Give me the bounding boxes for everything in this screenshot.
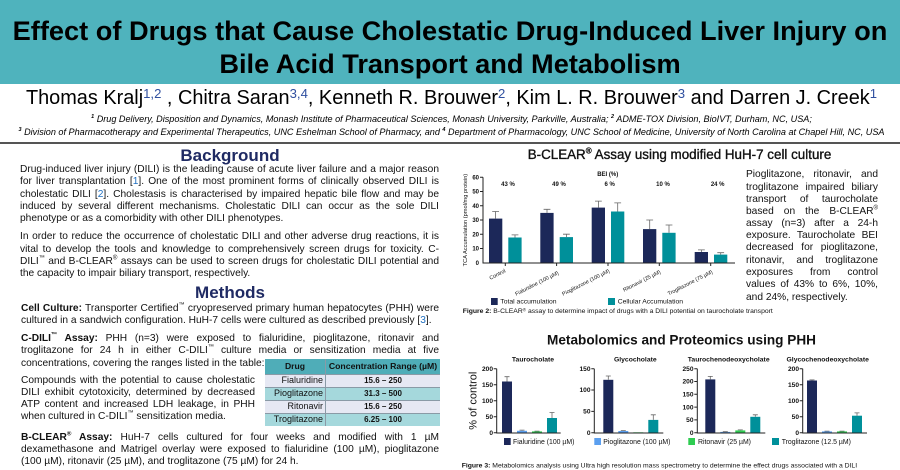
chart: Taurochenodeoxycholate: 150 (682, 392, 694, 398)
table row: Troglitazone (265, 413, 440, 426)
heading: metabolomics and proteomics: Metabolomics and Proteomics using PHH (547, 333, 816, 348)
chart: Glycochenodeoxycholate: 0 (795, 430, 799, 437)
legend: Fialuridine: Fialuridine (100 µM) (513, 439, 574, 446)
x axis labels: Troglitazone (75 µM) (667, 269, 714, 297)
chart: Glycocholate (579, 356, 663, 437)
text: B-CLEAR assay (21, 431, 439, 467)
chart: B-CLEAR TCA accumulation bar chart: 10 (472, 247, 480, 253)
heading: B-CLEAR assay: B-CLEAR® Assay using modified HuH-7 cell culture (528, 147, 831, 162)
text: background paragraph 1: induced by several different mechanisms. Cholestatic DILI can occur as the sole DILI (20, 201, 439, 212)
x axis labels: Ritonavir (25 µM) (622, 269, 662, 294)
table row: Pioglitazone: Pioglitazone (274, 388, 323, 398)
x axis labels: Pioglitazone (100 µM) (561, 268, 611, 298)
chart: Glycocholate: 150 (579, 366, 591, 373)
table row: Pioglitazone: 31.3 – 500 (364, 389, 402, 398)
table row: Troglitazone: 6.25 – 100 (364, 415, 402, 424)
chart: Taurocholate: 0 (489, 430, 493, 437)
chart: B-CLEAR TCA accumulation bar chart: 50 (472, 190, 480, 196)
text: background paragraph 2: the capacity to impair biliary transport, respectively. (20, 268, 250, 279)
table row: Fialuridine: 15.6 – 250 (364, 376, 402, 385)
affiliations: 1 Drug Delivery, Disposition and Dynamics, Monash Institute of Pharmaceutical Sciences, Monash University, Parkville, Australia; 2 ADME-TOX Division, BioIVT, Durham, NC, USA; (91, 114, 812, 124)
text: B-CLEAR findings: based on the B-CLEAR® (746, 204, 878, 216)
text: cell culture (21, 302, 439, 326)
x axis labels (489, 268, 714, 298)
BEI values: 6 % (605, 182, 616, 188)
BEI values: 10 % (656, 182, 670, 188)
legend: Ritonavir: Ritonavir (25 µM) (698, 439, 751, 446)
chart: B-CLEAR TCA accumulation bar chart: 30 (472, 218, 480, 224)
legend: cellular accumulation: Cellular Accumulation (618, 299, 683, 306)
text: background paragraph 1: for liver transplantation [1]. One of the most prominent forms of clinically observed DILI is (20, 176, 439, 187)
chart: B-CLEAR TCA accumulation bar chart: 20 (472, 232, 480, 238)
chart: Taurochenodeoxycholate: 0 (690, 430, 694, 437)
legend: Troglitazone: Troglitazone (12.5 µM) (782, 439, 851, 446)
table row: Fialuridine (265, 374, 440, 387)
title: Bile Acid Transport and Metabolism (219, 48, 681, 79)
text: B-CLEAR findings (746, 168, 878, 302)
chart: Glycochenodeoxycholate: 100 (788, 398, 799, 405)
table header: Drug (285, 361, 305, 371)
chart: B-CLEAR TCA accumulation bar chart (463, 172, 735, 306)
x axis labels: Control (489, 268, 507, 282)
caption: figure 3: Figure 3: Metabolomics analysis using Ultra high resolution mass spectrometry to determine the effect drugs associated with a DILI (462, 462, 857, 469)
chart: Taurocholate: 100 (482, 398, 493, 405)
text: cell culture: Cell Culture: Transporter Certified™ cryopreserved primary human hepatocytes (PHH) were (21, 302, 439, 314)
text: background paragraph 2: vital to develop the tools and knowledge to comprehensively screen drugs for toxicity. C- (20, 244, 439, 255)
BEI values (501, 172, 725, 188)
text: B-CLEAR findings: troglitazone impaired biliary (746, 182, 878, 192)
title banner (0, 0, 900, 84)
BEI values: 49 % (552, 182, 566, 188)
text: B-CLEAR findings: transport of taurocholate (746, 194, 878, 204)
chart: Glycochenodeoxycholate: 50 (792, 414, 799, 421)
affiliations (18, 114, 884, 137)
BEI values: 43 % (501, 182, 515, 188)
chart: Glycocholate: 100 (579, 387, 591, 394)
text: B-CLEAR assay: (100 µM), ritonavir (25 µM), and troglitazone (75 µM) for 24 h. (21, 456, 298, 467)
text: background paragraph 1: cholestatic DILI [2]. Cholestasis is characterised by impaired hepatic bile flow and may be (20, 189, 439, 200)
chart: Taurochenodeoxycholate: Taurochenodeoxycholate (688, 356, 770, 363)
caption: figure 2: assay to determine impact of drugs with a DILI potential on taurocholate transport (526, 308, 773, 315)
authors: Thomas Kralj1,2 , Chitra Saran3,4, Kenneth R. Brouwer2, Kim L. R. Brouwer3 and Darren J. Creek1 (26, 86, 877, 109)
text: background paragraph 2: In order to reduce the occurrence of cholestatic DILI and other adverse drug reactions, it is (20, 231, 439, 242)
text: B-CLEAR findings: assay (n=3) after a 24-h (746, 218, 878, 228)
text: cell culture: cultured in a sandwich configuration. HuH-7 cells were cultured as described previously [3]. (21, 315, 432, 326)
table row: Ritonavir: Ritonavir (287, 401, 323, 411)
chart: Taurochenodeoxycholate: 250 (682, 366, 694, 373)
heading: Background: Background (180, 146, 280, 165)
heading: Methods: Methods (195, 282, 265, 302)
chart: Taurocholate: 150 (482, 382, 493, 389)
table row: Troglitazone: Troglitazone (274, 414, 323, 424)
legend: total accumulation: Total accumulation (500, 299, 557, 306)
text: C-DILI assay (21, 332, 439, 369)
legend: Pioglitazone: Pioglitazone (100 µM) (603, 439, 670, 446)
y axis label: TCA Accumulation (pmol/mg protein) (463, 174, 469, 266)
chart: Taurocholate: 50 (486, 414, 493, 421)
table header: Concentration Range (µM) (329, 361, 437, 371)
chart: Glycocholate: Glycocholate (614, 356, 657, 363)
text: cytotoxicity (21, 375, 255, 422)
chart: Taurocholate (482, 356, 561, 437)
chart: Taurochenodeoxycholate: 200 (682, 379, 694, 386)
text: C-DILI assay: concentrations, covering the ranges listed in the table: (21, 358, 265, 369)
text: B-CLEAR findings: and 24%, respectively. (746, 292, 848, 302)
table: drug concentration ranges (265, 359, 440, 426)
text: B-CLEAR assay: B-CLEAR® Assay: HuH-7 cells cultured for four weeks and modified with 1 µM (21, 431, 439, 443)
title (13, 15, 887, 79)
text: B-CLEAR findings: exposures from control (746, 266, 878, 278)
chart: Glycochenodeoxycholate (787, 356, 869, 437)
y axis label: percent of control: % of control (468, 372, 480, 430)
text: background paragraph 2 (20, 231, 439, 279)
chart: Glycocholate: 0 (587, 430, 591, 437)
BEI values: 24 % (711, 182, 725, 188)
chart: B-CLEAR TCA accumulation bar chart: 40 (472, 204, 480, 210)
text: B-CLEAR findings: values of 43% to 6%, 10%, (746, 278, 878, 290)
chart: Glycochenodeoxycholate: 150 (788, 382, 799, 389)
text: B-CLEAR findings: exposure. Taurocholate BEI (746, 230, 878, 240)
table row: Fialuridine: Fialuridine (281, 375, 323, 385)
text: background paragraph 1: phenotype or as a comorbidity with other DILI phenotypes. (20, 213, 283, 224)
text: B-CLEAR findings: Pioglitazone, ritonavir, and (746, 168, 878, 180)
text: cytotoxicity: ATP content and increased LDH leakage, in PHH (21, 399, 255, 410)
table row: Ritonavir: 15.6 – 250 (364, 402, 402, 411)
text: cytotoxicity: Compounds with the potential to cause cholestatic (21, 375, 255, 386)
text: background paragraph 1: Drug-induced liver injury (DILI) is the leading cause of acute liver failure and a major reason (20, 164, 439, 175)
text: B-CLEAR findings: ritonavir, and troglitazone (746, 254, 878, 266)
BEI values: BEI (%) (597, 172, 618, 178)
caption: figure 2: ® (523, 306, 527, 312)
table row: Pioglitazone (265, 387, 440, 400)
x axis labels: Fialuridine (100 µM) (514, 270, 560, 298)
table row: Ritonavir (265, 400, 440, 413)
chart: Glycochenodeoxycholate: 200 (788, 366, 799, 373)
text: B-CLEAR assay: dexamethasone and Matrigel overlay were exposed to fialuridine (100 µM), pioglitazone (21, 444, 439, 455)
chart: Taurocholate: 200 (482, 366, 493, 373)
text: background paragraph 1 (20, 164, 439, 224)
chart: B-CLEAR TCA accumulation bar chart: 0 (476, 261, 480, 267)
chart: B-CLEAR TCA accumulation bar chart: 60 (472, 176, 480, 182)
text: cytotoxicity: when cultured in C-DILI™ sensitization media. (21, 410, 226, 422)
text: cytotoxicity: DILI exhibit cytotoxicity, determined by decreased (21, 387, 255, 398)
title: Effect of Drugs that Cause Cholestatic Drug-Induced Liver Injury on (13, 15, 887, 46)
text: B-CLEAR findings: decreased for pioglitazone, (746, 242, 878, 252)
affiliations: 3 Division of Pharmacotherapy and Experimental Therapeutics, UNC Eshelman School of Pharmacy, and 4 Department of Pharmacology, UNC School of Medicine, University of North Carolina at Chapel Hill, NC, USA (18, 127, 884, 137)
chart: Glycochenodeoxycholate: Glycochenodeoxycholate (787, 356, 869, 363)
text: background paragraph 2: DILI™ and B-CLEAR® assays can be used to screen drugs for cholestatic DILI potential and (20, 255, 439, 267)
text: C-DILI assay: troglitazone for 24 h in either C-DILI™ culture media or sensitization media at five (21, 344, 439, 356)
chart: Taurochenodeoxycholate: 100 (682, 404, 694, 411)
text: C-DILI assay: C-DILI™ Assay: PHH (n=3) were exposed to fialuridine, pioglitazone, ritonavir and (21, 332, 439, 344)
chart: Taurochenodeoxycholate (682, 356, 770, 437)
table header (265, 359, 440, 374)
chart: Taurochenodeoxycholate: 50 (686, 417, 694, 424)
caption: figure 2: Figure 2: B-CLEAR (463, 308, 523, 315)
chart: Glycocholate: 50 (583, 409, 591, 416)
chart: Taurocholate: Taurocholate (512, 356, 554, 363)
